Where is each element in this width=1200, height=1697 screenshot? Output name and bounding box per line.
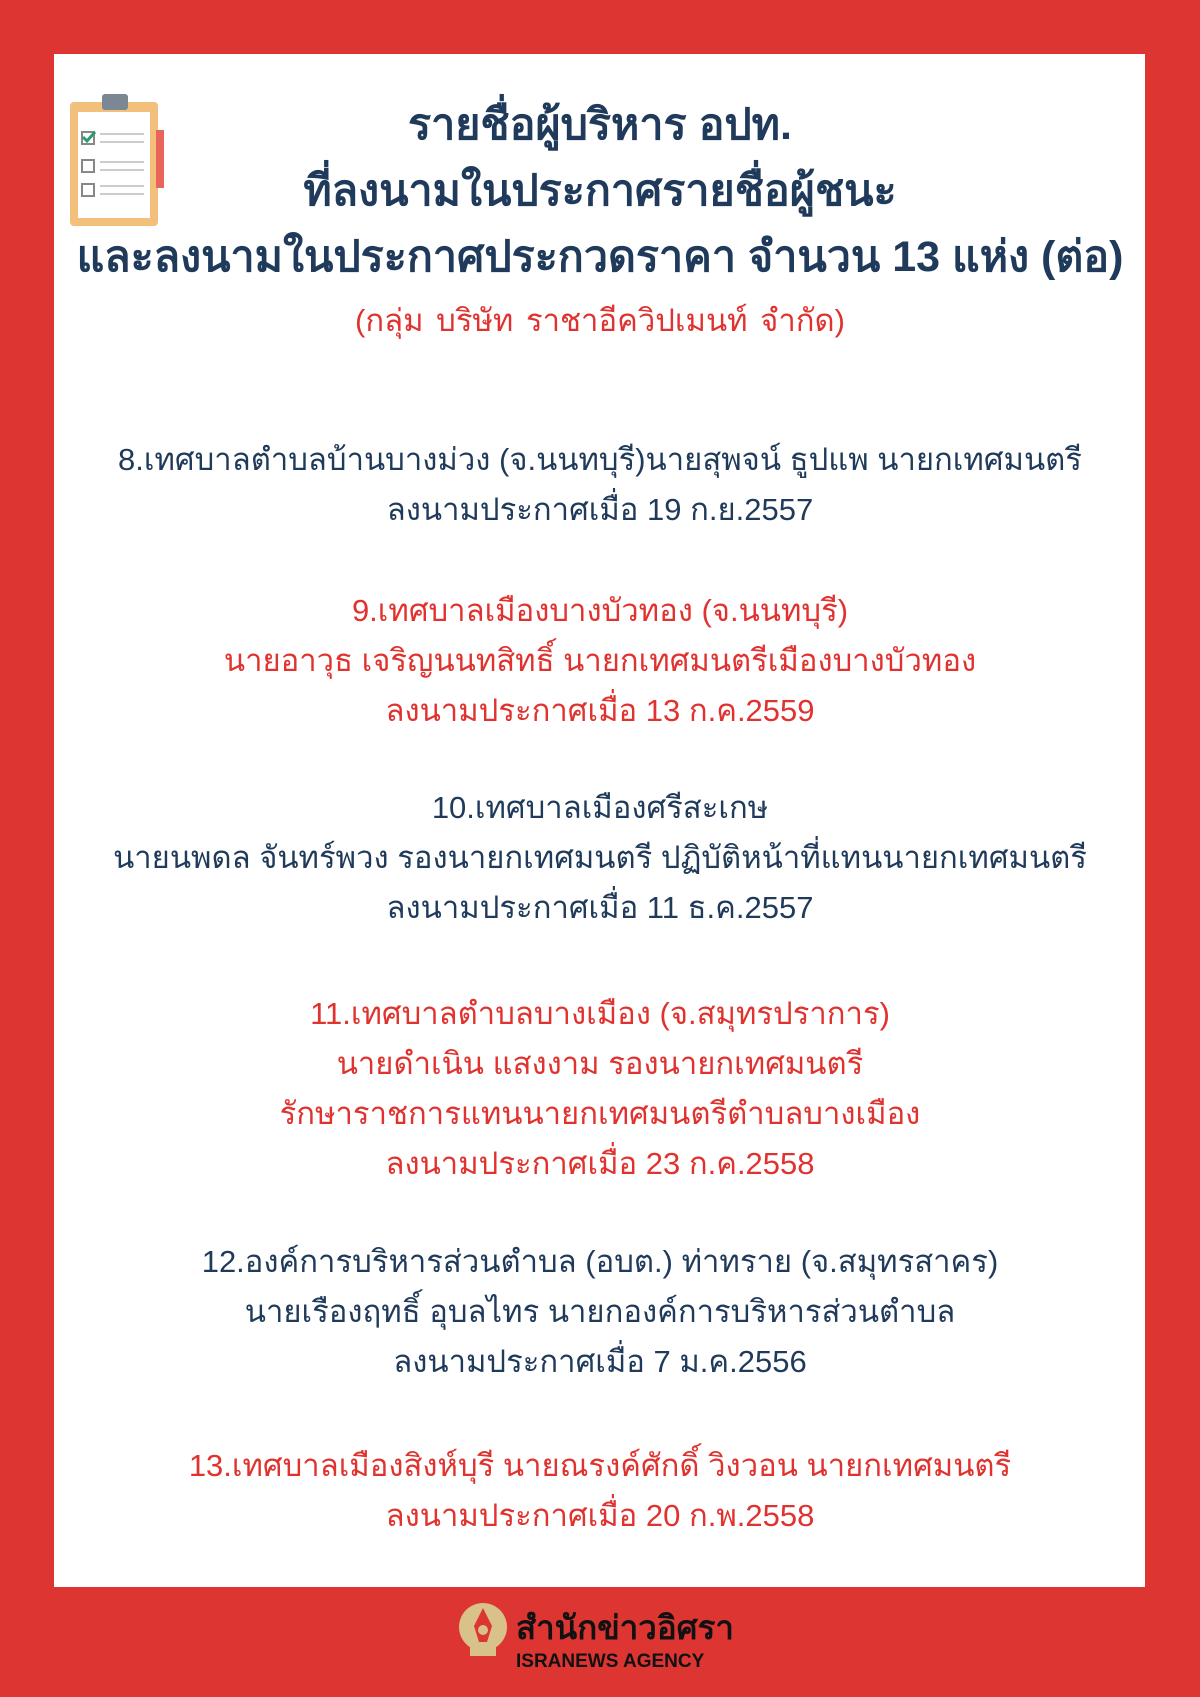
title: รายชื่อผู้บริหาร อปท. [408, 101, 792, 149]
logo [459, 1603, 734, 1672]
item 9 [224, 593, 976, 728]
item 12: 12.องค์การบริหารส่วนตำบล (อบต.) ท่าทราย (จ.สมุทรสาคร) [202, 1244, 998, 1279]
item 11: ลงนามประกาศเมื่อ 23 ก.ค.2558 [385, 1146, 815, 1181]
title [77, 94, 1123, 281]
icon: logo emblem [459, 1603, 507, 1656]
item 13 [189, 1443, 1011, 1533]
item 10 [113, 790, 1087, 925]
logo: ISRANEWS AGENCY [516, 1651, 704, 1672]
item 11: รักษาราชการแทนนายกเทศมนตรีตำบลบางเมือง [280, 1096, 920, 1131]
item 10: ลงนามประกาศเมื่อ 11 ธ.ค.2557 [387, 890, 813, 925]
logo text: สำนักข่าวอิศรา [516, 1609, 734, 1646]
icon: clipboard [70, 94, 164, 226]
item 13: ลงนามประกาศเมื่อ 20 ก.พ.2558 [386, 1498, 814, 1533]
item 11 [280, 996, 920, 1181]
item 9: 9.เทศบาลเมืองบางบัวทอง (จ.นนทบุรี) [352, 593, 848, 628]
item 8: 8.เทศบาลตำบลบ้านบางม่วง (จ.นนทบุรี)นายสุพจน์ ธูปแพ นายกเทศมนตรี [118, 442, 1082, 477]
item 8: ลงนามประกาศเมื่อ 19 ก.ย.2557 [387, 492, 813, 527]
subtitle: (กลุ่ม บริษัท ราชาอีควิปเมนท์ จำกัด) [355, 303, 845, 338]
item 12: นายเรืองฤทธิ์ อุบลไทร นายกองค์การบริหารส่วนตำบล [245, 1294, 955, 1329]
item 13: 13.เทศบาลเมืองสิงห์บุรี นายณรงค์ศักดิ์ วิงวอน นายกเทศมนตรี [189, 1448, 1011, 1483]
item 12: ลงนามประกาศเมื่อ 7 ม.ค.2556 [393, 1344, 807, 1379]
title: ที่ลงนามในประกาศรายชื่อผู้ชนะ [303, 167, 897, 215]
item 9: นายอาวุธ เจริญนนทสิทธิ์ นายกเทศมนตรีเมืองบางบัวทอง [224, 643, 976, 678]
item 10: 10.เทศบาลเมืองศรีสะเกษ [432, 790, 768, 825]
item 12 [202, 1244, 998, 1379]
item 11: นายดำเนิน แสงงาม รองนายกเทศมนตรี [337, 1046, 863, 1081]
title: และลงนามในประกาศประกวดราคา จำนวน 13 แห่ง (ต่อ) [77, 233, 1123, 281]
item 10: นายนพดล จันทร์พวง รองนายกเทศมนตรี ปฏิบัติหน้าที่แทนนายกเทศมนตรี [113, 840, 1087, 875]
item 11: 11.เทศบาลตำบลบางเมือง (จ.สมุทรปราการ) [310, 996, 890, 1031]
item 9: ลงนามประกาศเมื่อ 13 ก.ค.2559 [385, 693, 815, 728]
item 8 [118, 442, 1082, 527]
